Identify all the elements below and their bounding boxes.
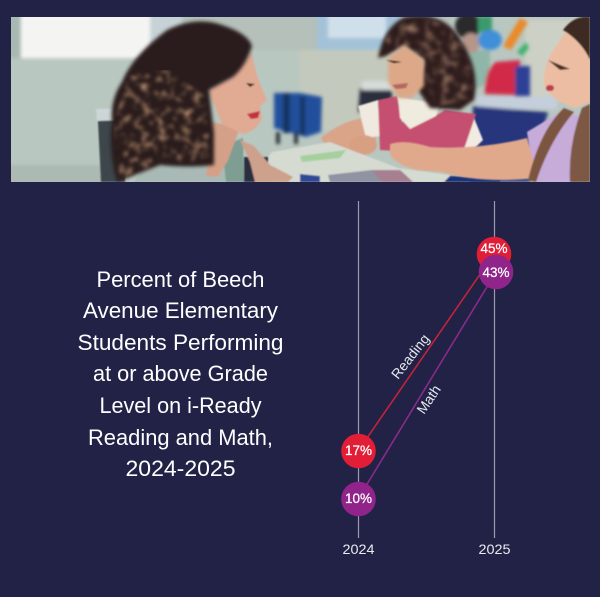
title: Students Performing: [78, 330, 284, 355]
slope chart: reading and math 2024 to 2025: [341, 201, 513, 557]
point: reading 2024: [341, 434, 376, 468]
axis line 2025: [494, 201, 496, 538]
desk at the left: [96, 108, 125, 182]
girl at right with lilac shirt: [390, 17, 590, 182]
point: reading 2024: 17%: [345, 443, 372, 458]
open book and tablet on the table: [258, 142, 500, 182]
title: 2024-2025: [126, 456, 236, 481]
classroom background: [11, 17, 590, 182]
math line: [358, 272, 496, 499]
curly hair: [111, 21, 252, 182]
title: Percent of Beech: [96, 267, 264, 292]
teacher with curly hair: [111, 21, 293, 182]
year label 2025: 2025: [478, 541, 511, 557]
reading label: Reading: [388, 331, 432, 382]
title: Avenue Elementary: [83, 298, 278, 323]
reading line: [358, 254, 494, 451]
background child and school supplies: [455, 13, 530, 96]
math label: Math: [413, 382, 444, 417]
point: math 2024: [341, 482, 376, 516]
title: Reading and Math,: [88, 425, 273, 450]
point: math 2025: 43%: [482, 265, 510, 280]
blue chair: [274, 93, 322, 144]
title: Level on i-Ready: [100, 393, 262, 418]
point: reading 2025: [477, 237, 511, 271]
point: math 2025: [479, 255, 513, 289]
title: [78, 267, 284, 481]
student in pink pinafore: [321, 16, 483, 160]
year label 2024: 2024: [342, 541, 375, 557]
photo: teacher and students at a classroom table: [11, 17, 590, 182]
student hair and face: [378, 16, 476, 110]
point: math 2024: 10%: [345, 491, 372, 506]
point: reading 2025: 45%: [480, 241, 508, 256]
title: at or above Grade: [93, 361, 268, 386]
axis line 2024: [358, 201, 360, 538]
background shelf and blue cabinet: [358, 81, 557, 182]
